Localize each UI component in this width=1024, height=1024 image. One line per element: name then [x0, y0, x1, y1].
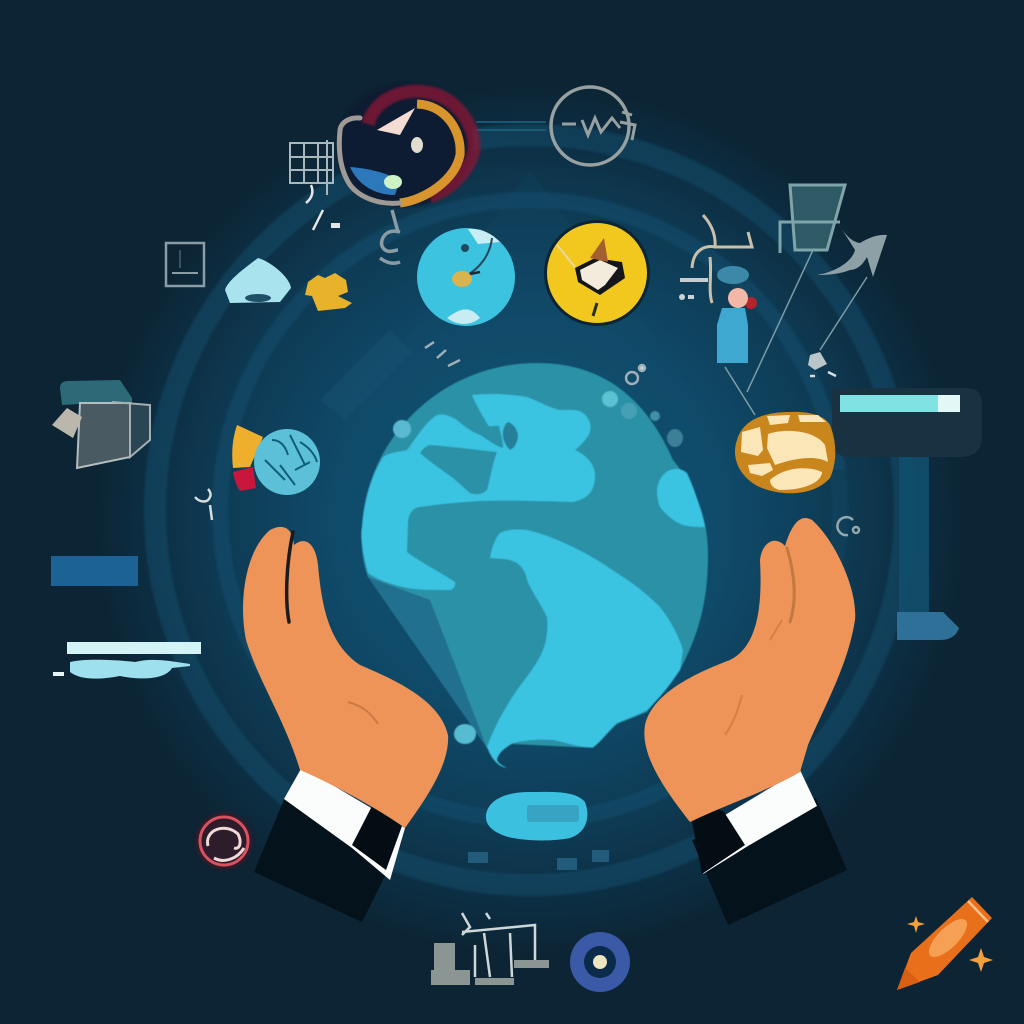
icon: small marks beside globe top: [425, 342, 836, 384]
icon: small square frame: [166, 243, 204, 286]
right sleeve: [692, 798, 847, 925]
icon: yellow circle: [544, 220, 650, 326]
icon: machine with bottle: [679, 215, 757, 363]
globe: [361, 363, 708, 768]
icon: right blue slab: [897, 612, 959, 640]
globe shaded side: [368, 577, 487, 748]
icon: left package box: [52, 380, 150, 468]
background glow rings: [90, 80, 970, 960]
icon: blue circle: [417, 228, 515, 326]
icon: waveform circle: [551, 87, 635, 165]
icon: left blue slab: [51, 556, 138, 586]
oval pedestal under globe: [486, 792, 587, 840]
icon: rainbow ring with dark centre: [290, 83, 474, 263]
left cuff: [284, 767, 405, 880]
right cuff: [703, 770, 817, 874]
right hand: [644, 518, 855, 925]
icon: small gauge right: [837, 517, 859, 535]
icon: golden cracked stone: [735, 412, 835, 493]
icon: left text-like bars: [53, 642, 201, 679]
globe land masses: [361, 394, 705, 768]
icon: light blue cloud: [225, 258, 291, 303]
watermark: crayon logo: [897, 897, 993, 990]
icon: right bar panel: [832, 388, 982, 457]
icon: small hook mark: [195, 489, 212, 520]
right palm and fingers: [644, 518, 855, 822]
left sleeve: [254, 797, 402, 922]
bottom dashes: [468, 850, 609, 870]
icon: bottom machine: [431, 913, 549, 985]
icon: red ring: [195, 812, 253, 870]
left hand: [243, 527, 448, 922]
icon: left pie and globe: [232, 425, 320, 495]
icon: chair frame top right: [725, 185, 887, 415]
icon: blue donut with dot: [570, 932, 630, 992]
icon: yellow splat: [305, 273, 352, 311]
left palm and fingers: [243, 527, 448, 828]
